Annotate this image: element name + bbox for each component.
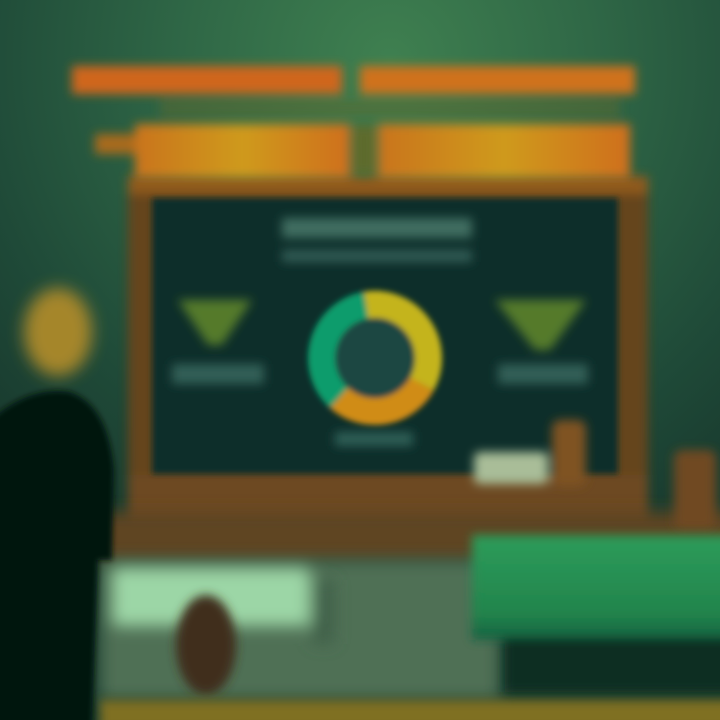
donut chart: [321, 304, 428, 412]
chalkboard frame: [128, 176, 648, 525]
donut caption: [335, 432, 413, 446]
person silhouette: [0, 288, 114, 720]
desk back edge: [100, 512, 720, 562]
chalkboard panel: [152, 198, 618, 474]
desk surface: [100, 560, 500, 700]
desk front edge: [100, 700, 720, 720]
head: [24, 288, 92, 376]
title: [72, 66, 635, 178]
small objects on ledge: [474, 420, 716, 530]
heading on board: [282, 218, 472, 262]
open paper: [112, 568, 334, 644]
body: [0, 391, 114, 720]
green book: [472, 535, 720, 692]
right icon and text: [495, 300, 588, 384]
brown object on desk: [176, 595, 236, 695]
left icon and text: [172, 300, 264, 384]
